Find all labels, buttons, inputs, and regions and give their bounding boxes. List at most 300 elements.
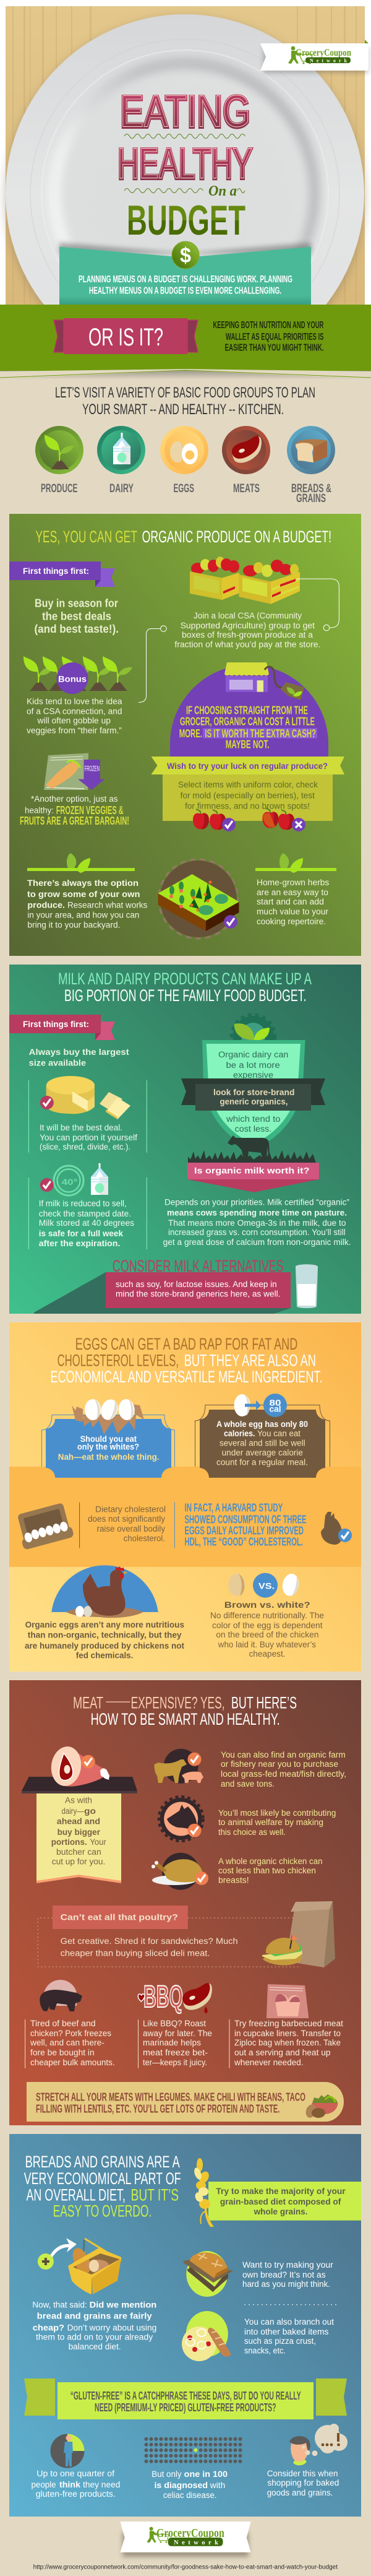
icon: eggs — [160, 426, 208, 495]
panel: meat — [9, 1680, 361, 2125]
text: other baked items: snacks, etc. — [244, 2346, 286, 2356]
icon: person thinking — [289, 2424, 348, 2465]
callout: organic dairy shield — [181, 1015, 325, 1163]
text: harvard study: HDL, THE “GOOD” CHOLESTEROL. — [184, 1536, 303, 1548]
grocer question text — [179, 705, 317, 750]
ribbon: store brand: generic organics, — [220, 1096, 288, 1106]
text: organic farm: and save tons. — [221, 1779, 275, 1789]
banner: buy bigger portions: go — [84, 1806, 96, 1816]
card: 80 calories: several and still be well — [220, 1439, 305, 1448]
callout: poultry: Can’t eat all that poultry? — [61, 1912, 178, 1922]
heading: meat: HOW TO BE SMART AND HEALTHY. — [91, 1710, 280, 1728]
ribbon: first things first — [9, 1015, 115, 1040]
text column: bbq: Like BBQ? Roast — [143, 2019, 206, 2028]
card: 80 calories: calories. — [224, 1428, 255, 1438]
text column: freezing: in cupcake liners. Transfer to — [234, 2029, 341, 2038]
text: frozen option: healthy: — [25, 806, 54, 815]
icon: egg equals 80 cal: 80 — [270, 1398, 281, 1408]
heading: eggs: CHOLESTEROL LEVELS, — [58, 1351, 179, 1370]
text: omega: Depends on your priorities. Milk certified “organic” — [164, 1198, 349, 1207]
icon: store — [224, 662, 269, 692]
banner: buy bigger portions: As with — [65, 1796, 92, 1805]
text: make your own bread: Want to try making your — [242, 2260, 333, 2270]
icon: animal welfare seal — [159, 1797, 203, 1841]
text: animal welfare: to animal welfare by making — [218, 1818, 323, 1827]
icon: bad apples — [262, 808, 305, 831]
callout: milk alternatives — [34, 1257, 291, 1314]
icon: breads and grains — [287, 426, 335, 505]
callout: whole grains: whole grains. — [254, 2206, 308, 2216]
panel: cheese tip — [28, 1076, 147, 1153]
icon: meats: MEATS — [233, 482, 260, 495]
text: cheap grains: bread and grains are fairly — [37, 2311, 152, 2321]
ribbon: regular produce: Wish to try your luck on regular produce? — [167, 761, 328, 771]
heading: grains: BREADS AND GRAINS ARE A — [25, 2153, 180, 2171]
icon: cow and grass — [188, 1135, 316, 1163]
text: buy in season: (and best taste!). — [35, 623, 119, 635]
card: egg whites — [42, 1397, 174, 1478]
callout: milk alternatives: such as soy, for lactose issues. And keep in — [116, 1280, 277, 1289]
text: one quarter: think — [59, 2479, 80, 2489]
panel: cheese tip: You can portion it yourself — [40, 1133, 137, 1142]
text: make your own bread: hard as you might think. — [242, 2279, 330, 2289]
callout: organic dairy shield: cost less. — [235, 1124, 271, 1134]
text: other baked items: into other baked items — [244, 2327, 329, 2336]
icon: garden plot badge — [158, 859, 239, 939]
footer logo ribbon: GroceryCoupon — [156, 2526, 224, 2540]
title: on a: On a — [208, 183, 237, 199]
heading: produce: YES, YOU CAN GET — [35, 527, 137, 546]
box: selection tips: for firmness, and no brown spots! — [185, 802, 310, 811]
heading: meat: MEAT — [73, 1693, 103, 1712]
text: brown vs white — [210, 1600, 324, 1659]
icon: person in pie — [51, 2434, 84, 2468]
banner: buy bigger portions: Your — [90, 1837, 106, 1847]
callout: organic dairy shield: which tend to — [226, 1114, 281, 1124]
text: harvard study: IN FACT, A HARVARD STUDY — [184, 1502, 283, 1514]
text column: bbq — [139, 2019, 212, 2068]
text: kids: will often gobble up — [36, 716, 111, 726]
text: organic eggs: than non-organic, technically, but they — [28, 1630, 182, 1640]
icon: seal and leaves — [231, 1015, 275, 1058]
icon: egg equals 80 cal: cal — [270, 1404, 281, 1414]
text: one in 100 — [151, 2469, 228, 2500]
text: cheap grains: Now, that said: — [32, 2301, 87, 2310]
text: omega: That means more Omega-3s in the milk, due to — [168, 1218, 346, 1228]
ribbon: store brand — [181, 1078, 325, 1111]
logo ribbon: top right: Network — [310, 58, 348, 63]
grocer question text: MAYBE NOT. — [226, 738, 270, 750]
intro text — [79, 274, 292, 296]
logo ribbon: top right: GroceryCoupon — [296, 48, 351, 58]
text: csa — [174, 611, 320, 649]
text: consider this — [267, 2469, 339, 2497]
text: omega: means cows spending more time on pasture. — [167, 1208, 347, 1218]
icon: eggs: EGGS — [173, 482, 194, 495]
text: one in 100: is diagnosed — [155, 2480, 208, 2490]
text: cheap grains: balanced diet. — [69, 2342, 121, 2351]
text: organic eggs: fed chemicals. — [76, 1650, 133, 1660]
banner: buy bigger portions: ahead and — [57, 1816, 100, 1826]
panel: intro teal panel — [59, 241, 311, 305]
text: one quarter: they need — [83, 2480, 120, 2489]
ribbon: first things first: First things first: — [23, 1019, 89, 1029]
icon: breads and grains: BREADS & — [291, 482, 331, 495]
callout: whole grains: Try to make the majority of your — [216, 2186, 346, 2196]
panel: milk and dairy — [9, 965, 361, 1314]
text: animal welfare: this choice as well. — [218, 1828, 286, 1837]
text: herbs: Home-grown herbs — [257, 878, 330, 887]
heading: dairy — [58, 969, 312, 1005]
callout: poultry: Get creative. Shred it for sandwiches? Much — [61, 1936, 238, 1946]
hero: wood table and plate — [0, 6, 370, 305]
text: largest size — [29, 1047, 129, 1068]
panel: breads and grains — [9, 2134, 361, 2517]
text: herbs — [257, 878, 330, 926]
banner: gluten free — [24, 2379, 347, 2419]
text: csa: fraction of what you’d pay at the store. — [174, 640, 320, 649]
callout: whole grains — [193, 2158, 361, 2227]
text: brown vs white: on the breed of the chicken — [216, 1630, 319, 1639]
card: 80 calories: count for a regular meal. — [216, 1458, 308, 1467]
icon: thought bubble — [315, 2424, 348, 2453]
heading: grains: EASY TO OVERDO. — [53, 2201, 151, 2220]
text: brown vs white: cheapest. — [249, 1649, 286, 1659]
divider bar left with leaves — [27, 853, 135, 873]
icon: glass of milk — [296, 1264, 318, 1308]
callout: organic dairy shield: be a lot more — [226, 1060, 280, 1070]
text: buy in season — [35, 597, 119, 635]
text: dietary cholesterol: raise overall bodily — [96, 1524, 165, 1533]
banner: is organic milk worth it: Is organic milk worth it? — [194, 1166, 309, 1176]
text: brown vs white: who laid it. Buy whatever’s — [218, 1640, 316, 1649]
icon: meats — [222, 426, 270, 495]
box: selection tips: for mold (especially on berries), test — [181, 791, 315, 800]
card: egg whites: Nah—eat the whole thing. — [58, 1452, 160, 1462]
panel: organic produce — [9, 514, 361, 956]
banner: buy bigger portions: cut up for you. — [52, 1857, 105, 1867]
icon: dairy: DAIRY — [109, 482, 134, 495]
text: kids — [27, 697, 122, 735]
text: consider this: Consider this when — [267, 2469, 338, 2478]
text: consider this: goods and grains. — [267, 2488, 333, 2497]
text: kids: of a CSA connection, and — [27, 706, 122, 716]
text: dietary cholesterol: Dietary cholesterol — [95, 1505, 166, 1514]
text: omega: get a great dose of calcium from non-organic milk. — [163, 1238, 351, 1247]
card: egg whites: Should you eat — [80, 1434, 137, 1444]
text: cheap grains: them to add on to your already — [36, 2332, 153, 2341]
text: herbs: cooking repertoire. — [257, 917, 326, 926]
heading: grains: BUT IT’S — [131, 2185, 179, 2204]
text: grow your own: Research what works — [67, 901, 148, 910]
ribbon: store brand: look for store-brand — [213, 1087, 294, 1097]
panel: milk date tip: after the expiration. — [39, 1238, 120, 1248]
text: csa: Join a local CSA (Community — [194, 611, 302, 620]
ribbon: regular produce — [151, 757, 344, 774]
panel: eggs — [9, 1322, 361, 1672]
logo ribbon: top right — [260, 40, 369, 73]
callout: stretch meats with legumes — [27, 2082, 344, 2122]
text: frozen option — [20, 794, 129, 827]
icon: bag and sandwich — [262, 1901, 335, 1967]
banner: is organic milk worth it — [187, 1163, 319, 1192]
card: 80 calories — [195, 1394, 330, 1478]
icon: cow and pig — [155, 1749, 203, 1784]
callout: organic dairy shield: expensive — [233, 1070, 273, 1080]
food group icons — [35, 426, 335, 505]
text column: freezing — [229, 2019, 343, 2068]
icon: price tag — [265, 667, 304, 700]
icon: produce: PRODUCE — [41, 482, 78, 495]
text: make your own bread: own bread? It’s not as — [242, 2270, 326, 2279]
icon: hen on nest — [51, 1565, 158, 1618]
band: or is it — [0, 305, 371, 379]
text: dietary cholesterol — [80, 1503, 166, 1548]
title — [117, 87, 252, 244]
text column: pork — [25, 2019, 115, 2068]
icon: milk carton — [91, 1163, 108, 1195]
icon: breads and grains: GRAINS — [296, 492, 326, 505]
text column: freezing: out a serving and heat up — [234, 2048, 331, 2057]
ribbon: first things first — [9, 562, 115, 587]
ribbon: or is it — [54, 318, 198, 354]
icon: frozen carrots: FROZEN — [85, 765, 100, 773]
text: brown vs white: No difference nutritionally. The — [210, 1611, 324, 1620]
text: one quarter: gluten-free products. — [36, 2489, 116, 2499]
card: egg whites: only the whites? — [77, 1442, 139, 1452]
text: organic farm: You can also find an organic farm — [221, 1750, 346, 1759]
icon: brown vs white eggs: VS. — [258, 1581, 275, 1591]
text column: freezing: whenever needed. — [234, 2058, 304, 2067]
wood table — [6, 6, 365, 305]
text: herbs: start and can add — [257, 897, 324, 906]
box: selection tips: Select items with uniform color, check — [178, 780, 318, 789]
ribbon: first things first: First things first: — [23, 566, 89, 576]
callout: poultry — [38, 1906, 301, 1967]
chart: 1 in 100 dots — [146, 2439, 241, 2461]
text: grow your own: to grow some of your own — [27, 889, 140, 899]
text: organic farm: or fishery near you to purchase — [221, 1759, 338, 1769]
heading: meat: BUT HERE’S — [231, 1693, 297, 1712]
title: Healthy: HEALTHY — [117, 140, 252, 188]
text: omega: increased grass vs. corn consumption. You’ll still — [168, 1228, 346, 1237]
icon: bbq: BBQ — [143, 1979, 183, 2014]
card: 80 calories: You can eat — [257, 1429, 301, 1438]
text: organic eggs: are humanely produced by chickens not — [25, 1641, 184, 1650]
icon: dairy — [97, 426, 145, 495]
icon: egg equals 80 cal — [234, 1394, 287, 1417]
connector: crates to kids — [139, 579, 339, 702]
grocer question text: MORE. — [179, 727, 202, 740]
banner: buy bigger portions: portions. — [51, 1837, 87, 1847]
text: one in 100: one in 100 — [184, 2469, 228, 2479]
icon: zip bag cupcake — [267, 1984, 309, 2018]
card: 80 calories: A whole egg has only 80 — [216, 1419, 308, 1429]
source url: http://www.grocerycouponnetwork.com/community/for-goodness-sake-how-to-eat-smart-and-watch-your-budget — [33, 2564, 338, 2570]
text column: bbq: ter—keeps it juicy. — [143, 2058, 207, 2067]
text column: freezing: Ziploc bag when frozen. Take — [234, 2038, 341, 2047]
plate — [0, 13, 370, 305]
title: budget: BUDGET — [127, 197, 245, 244]
icon: pizza and baguette — [182, 2311, 231, 2361]
text: herbs: much value to your — [257, 907, 329, 916]
text: organic farm: local grass-fed meat/fish directly, — [221, 1769, 346, 1779]
icon: cracked eggs — [72, 1397, 144, 1434]
panel: milk date tip: is safe for a full week — [39, 1228, 123, 1238]
text: whole chicken: breasts! — [218, 1876, 249, 1885]
text column: bbq: meat freeze bet- — [143, 2048, 208, 2057]
text: one quarter: Up to one quarter of — [36, 2469, 114, 2478]
text: kids: veggies from “their farm.” — [27, 726, 122, 735]
heading: grains: AN OVERALL DIET, — [26, 2185, 126, 2204]
footer logo ribbon — [120, 2522, 251, 2557]
text column: pork: Tired of beef and — [30, 2019, 96, 2028]
title: Healthy: HEALTHY — [117, 139, 252, 188]
icon: dollar coin: $ — [180, 244, 191, 267]
text column: pork: well, and can there- — [30, 2038, 104, 2047]
footer logo ribbon: Network — [174, 2539, 218, 2546]
heading: meat — [73, 1693, 297, 1728]
text: harvard study: EGGS DAILY ACTUALLY IMPROVED — [184, 1525, 304, 1537]
text: dietary cholesterol: does not significantly — [88, 1514, 165, 1524]
title: Eating: EATING — [120, 87, 250, 137]
text: animal welfare — [218, 1808, 336, 1837]
icon: pig — [40, 1980, 82, 2011]
title: Healthy — [117, 139, 252, 188]
icon: 40 degree dial: 40° — [62, 1177, 78, 1187]
text: one quarter — [31, 2469, 120, 2499]
callout: purple dome with grocer — [170, 662, 328, 757]
heading: eggs — [51, 1335, 323, 1386]
callout: milk alternatives: CONSIDER MILK ALTERNATIVES — [113, 1257, 284, 1275]
text: largest size: size available — [29, 1058, 86, 1068]
icon: loaf in pan — [184, 2251, 233, 2297]
text: grow your own: in your area, and how you can — [27, 911, 139, 920]
text: one in 100: with — [210, 2481, 225, 2490]
text: csa: Supported Agriculture) group to get — [181, 621, 315, 630]
icon: egg carton — [15, 1502, 74, 1550]
icon: plus with arrow — [38, 2238, 77, 2270]
text column: bbq: away for later. The — [143, 2029, 212, 2038]
text: grow your own: bring it to your backyard. — [27, 921, 120, 930]
icon: good apples — [193, 809, 236, 831]
icon: seedlings with bonus badge — [23, 656, 132, 694]
text: cheap grains: Did we mention — [90, 2300, 156, 2310]
text: organic eggs — [25, 1620, 184, 1660]
text: brown vs white: color of the egg is dependent — [212, 1621, 323, 1630]
text: frozen option: *Another option, just as — [31, 794, 118, 804]
icon: roast chicken — [151, 1853, 208, 1890]
text: kids: Kids tend to love the idea — [27, 697, 122, 706]
icon: seedlings with bonus badge: Bonus — [58, 674, 87, 683]
text: organic eggs: Organic eggs aren’t any more nutritious — [25, 1620, 184, 1629]
ribbon: or is it: OR IS IT? — [88, 324, 163, 351]
panel: cheese tip: It will be the best deal. — [40, 1123, 122, 1132]
text: one in 100: But only — [151, 2470, 182, 2479]
callout: milk alternatives: mind the store-brand generics here, as well. — [116, 1290, 281, 1299]
text: grow your own — [27, 878, 148, 930]
panel: cheese tip: (slice, shred, divide, etc.). — [40, 1142, 130, 1151]
text column: bbq: marinade helps — [143, 2038, 201, 2047]
icon: brown vs white eggs — [228, 1572, 301, 1598]
text: frozen option: FROZEN VEGGIES & — [56, 804, 124, 817]
icon: 40 degree dial — [40, 1166, 83, 1195]
panel: milk date tip: Milk stored at 40 degrees — [39, 1218, 134, 1228]
icon: salad and beans — [304, 2094, 338, 2119]
banner: buy bigger portions: buy bigger — [58, 1827, 101, 1837]
text: organic farm — [221, 1750, 346, 1789]
text: animal welfare: You’ll most likely be contributing — [218, 1808, 336, 1818]
keeping both text — [213, 320, 324, 353]
callout: poultry: cheaper than buying sliced deli meat. — [61, 1948, 210, 1958]
banner: buy bigger portions — [36, 1793, 121, 1883]
icon: ham on board — [22, 1745, 137, 1793]
text: one quarter: people — [31, 2480, 56, 2489]
callout: whole grains: grain-based diet composed of — [220, 2197, 341, 2206]
text: whole chicken — [218, 1857, 323, 1885]
intro heading — [55, 384, 315, 418]
banner: buy bigger portions: butcher can — [56, 1847, 101, 1857]
text: whole chicken: cost less than two chicken — [218, 1866, 316, 1875]
banner: buy bigger portions: dairy— — [62, 1806, 84, 1816]
text: brown vs white: Brown vs. white? — [224, 1600, 310, 1610]
text column: freezing: Try freezing barbecued meat — [234, 2019, 343, 2028]
icon: wheat — [193, 2158, 214, 2227]
heading: grains: VERY ECONOMICAL PART OF — [24, 2169, 181, 2188]
heading: grains — [24, 2153, 181, 2220]
icon: bread basket with plus — [38, 2238, 121, 2294]
title: Eating: EATING — [120, 88, 250, 137]
text: csa: boxes of fresh-grown produce at a — [182, 630, 313, 640]
icon: apple crates — [190, 557, 300, 604]
icon: dollar coin — [172, 241, 199, 269]
text column: pork: cheaper bulk amounts. — [30, 2058, 115, 2067]
box: selection tips — [163, 774, 333, 831]
text: other baked items: You can also branch out — [244, 2317, 334, 2327]
text: buy in season: Buy in season for — [35, 597, 118, 609]
text: frozen option: FRUITS ARE A GREAT BARGAIN! — [20, 815, 129, 827]
card: 80 calories: under average calorie — [222, 1448, 303, 1457]
text column: pork: fore be bought in — [30, 2048, 95, 2057]
text: buy in season: the best deals — [42, 610, 111, 623]
text: dietary cholesterol: cholesterol. — [124, 1534, 165, 1543]
panel: milk date tip — [28, 1163, 147, 1249]
text: make your own bread — [242, 2260, 333, 2289]
text: whole chicken: A whole organic chicken can — [218, 1857, 323, 1866]
text: harvard study — [174, 1502, 307, 1548]
icon: produce — [35, 426, 83, 495]
divider bar right with leaves — [255, 853, 336, 873]
panel: milk date tip: If milk is reduced to sell, — [39, 1199, 127, 1208]
icon: heart — [321, 1512, 352, 1545]
text: cheap grains — [32, 2300, 156, 2351]
text: consider this: shopping for baked — [267, 2478, 339, 2487]
icon: cheese — [40, 1076, 130, 1119]
text: grow your own: produce. — [27, 900, 65, 910]
heading: produce — [35, 527, 331, 546]
panel: milk date tip: check the stamped date. — [39, 1209, 131, 1218]
text: herbs: are an easy way to — [257, 888, 328, 897]
text: cheap grains: cheap? — [33, 2322, 64, 2332]
text: largest size: Always buy the largest — [29, 1047, 129, 1057]
icon: frozen carrots — [44, 753, 105, 790]
heading: meat: EXPENSIVE? YES, — [131, 1693, 225, 1712]
text: grow your own: There’s always the option — [27, 878, 139, 888]
text column: pork: chicken? Pork freezes — [30, 2029, 111, 2038]
text: cheap grains: Don’t worry about using — [67, 2323, 156, 2332]
text: other baked items: such as pizza crust, — [244, 2336, 316, 2346]
callout: organic dairy shield: Organic dairy can — [218, 1050, 288, 1059]
